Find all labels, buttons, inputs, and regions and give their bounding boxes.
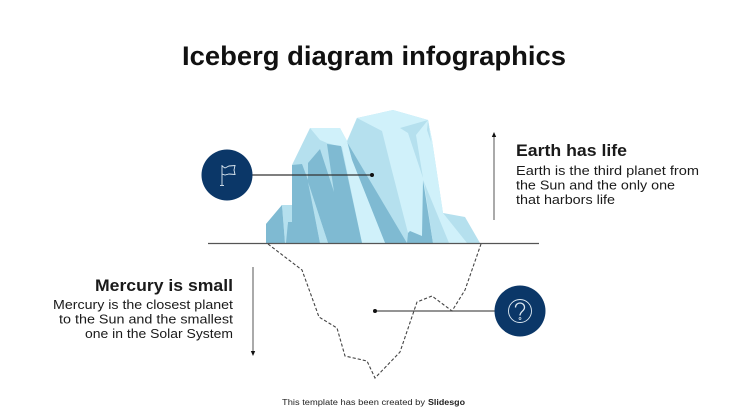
icon: flag in circle with leader line	[202, 150, 374, 200]
text block: Mercury is small: to the Sun and the smallest	[59, 312, 234, 326]
text block: Earth has life: Earth has life	[516, 141, 627, 160]
title: Iceberg diagram infographics	[182, 41, 566, 71]
icon: question mark in circle with leader line	[373, 286, 546, 336]
text block: Earth has life: the Sun and the only one	[516, 178, 675, 192]
arrow up	[492, 132, 496, 220]
text block: Mercury is small: one in the Solar System	[85, 327, 233, 341]
footer credit: This template has been created by	[282, 398, 425, 407]
text block: Mercury is small: Mercury is the closest planet	[53, 298, 234, 312]
footer credit	[282, 398, 465, 407]
arrow down	[251, 267, 255, 356]
iceberg below water dashed outline	[268, 244, 481, 378]
text block: Mercury is small	[53, 276, 234, 341]
text block: Earth has life: that harbors life	[516, 193, 615, 207]
waterline	[208, 242, 539, 244]
text block: Earth has life: Earth is the third planet from	[516, 164, 699, 178]
iceberg above water	[266, 110, 480, 243]
footer credit: Slidesgo	[428, 398, 465, 407]
text block: Mercury is small: Mercury is small	[95, 276, 233, 295]
text block: Earth has life	[516, 141, 699, 207]
